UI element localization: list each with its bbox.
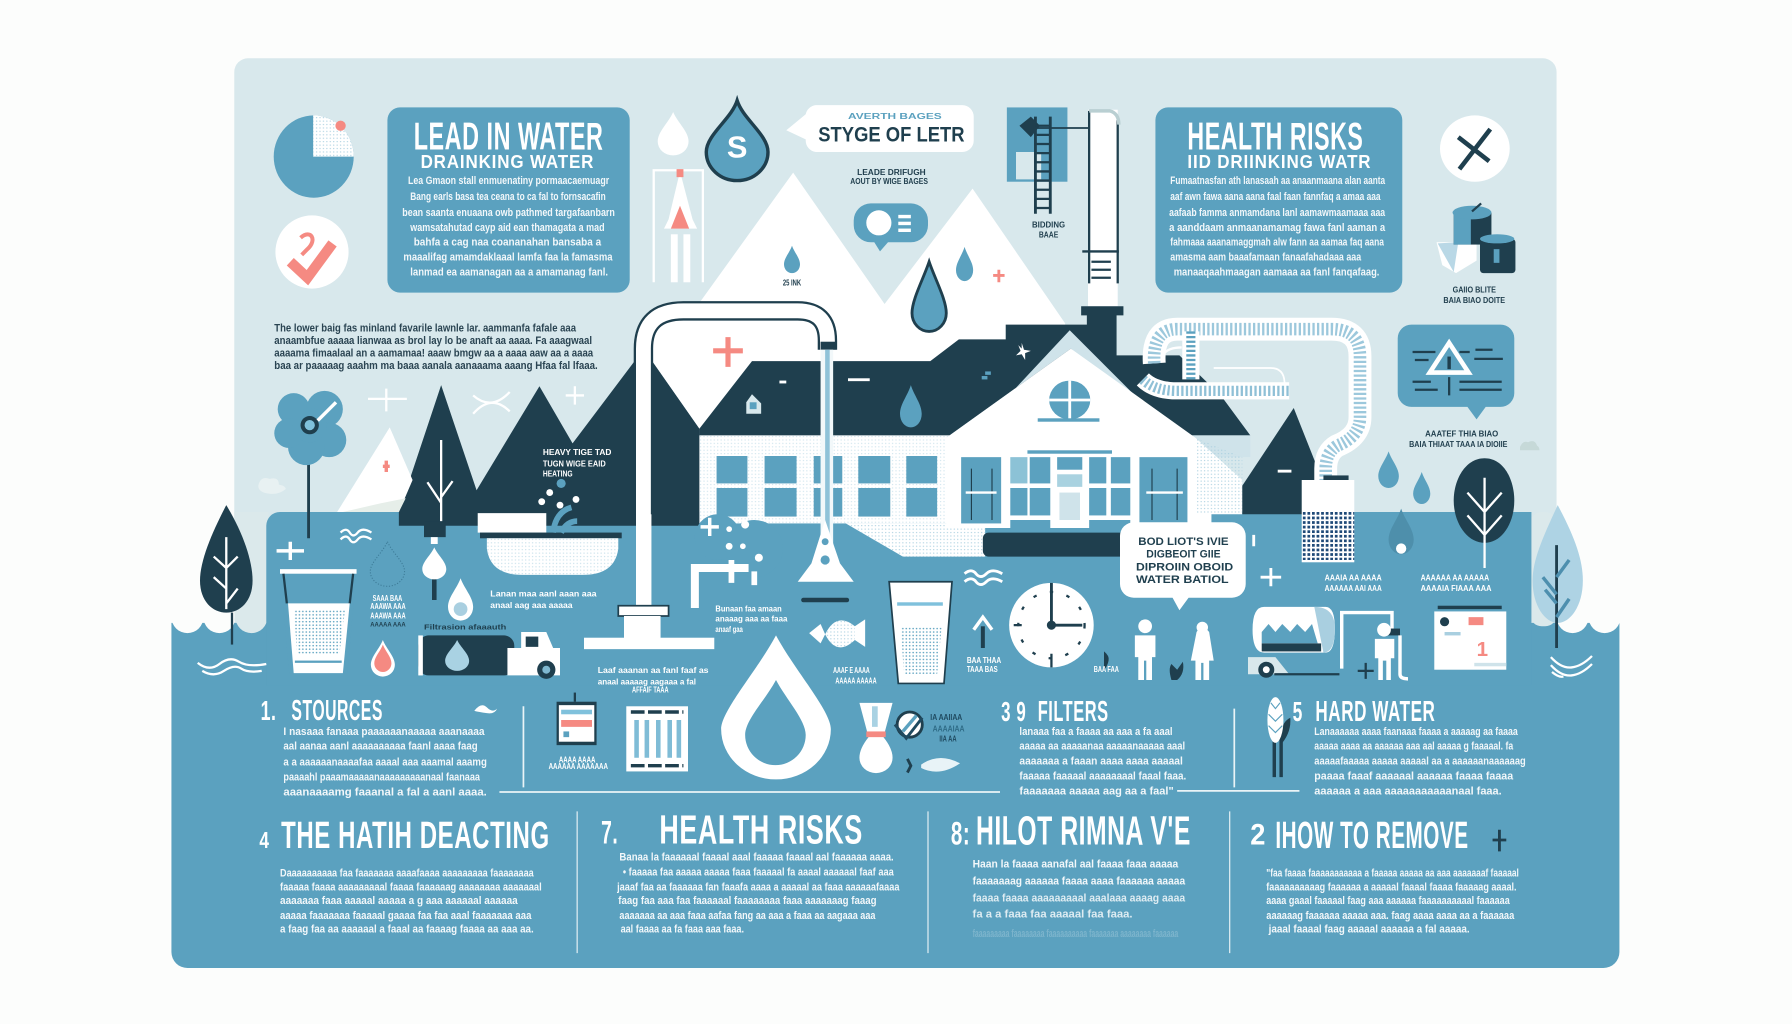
icon: bottle xyxy=(859,703,893,773)
body: aaaaa aa aaaaanaa aaaaanaaaaa aaal xyxy=(1019,741,1185,753)
heading: THE HATIH DEACTING xyxy=(281,814,550,856)
wave marks xyxy=(965,571,1002,585)
bathtub with splash xyxy=(478,479,622,575)
callout: water note: DIPROIIN OBOID xyxy=(1136,561,1233,573)
small white mountain with plus xyxy=(337,427,413,512)
body: aaaa gaaal faaaaal faag aaa aaaaaa faaaaaaaaaal faaaaaa xyxy=(1266,895,1511,907)
speech bubble icon xyxy=(854,203,928,251)
body text: Bang earls basa tea ceana to ca fal to fornsacafin xyxy=(410,191,606,203)
icon: light blue tree xyxy=(1533,505,1583,648)
icon: pole gauge xyxy=(654,169,703,282)
body text: wamsatahutad cayp aid ean thamagata a mad xyxy=(409,222,605,234)
body xyxy=(616,852,900,936)
tower ladder panel: BIDDING xyxy=(1032,220,1065,229)
body xyxy=(973,858,1186,940)
white dash on dark house xyxy=(1278,470,1291,473)
people xyxy=(1104,619,1214,680)
number: 4 xyxy=(259,827,270,853)
body: aaaaafaaaaa aaaaa aaaaal aa a aaaaaanaaaaaag xyxy=(1314,756,1526,768)
body: fa a a faaa faa aaaaal faa faaa. xyxy=(973,909,1133,921)
section 5: hard water xyxy=(1293,696,1526,797)
check caption: AAAAIAA xyxy=(933,724,965,733)
clipboard caption: AAAA AAAA xyxy=(559,755,596,764)
icon: water tank trailer xyxy=(1248,607,1339,678)
body: faaaaaaa aaaaa aag aa a faal" xyxy=(1019,785,1174,797)
label on dark mountain: HEATING xyxy=(543,470,573,479)
hydrant caption: anaaag aaa aa faaa xyxy=(715,615,788,624)
heading: HARD WATER xyxy=(1315,696,1435,728)
filter box xyxy=(1302,475,1354,562)
number: 3 9 xyxy=(1001,696,1026,727)
intro paragraph xyxy=(274,322,598,372)
boxes caption: BAIA BIAO DOITE xyxy=(1443,296,1506,305)
icon: mountain drop with label xyxy=(783,246,801,288)
heading: STOURCES xyxy=(291,695,383,727)
icon: small fish xyxy=(907,758,960,773)
white mountains xyxy=(699,173,1065,366)
body: lanaaa faa a faaaa aa aaa a fa aaal xyxy=(1019,726,1173,738)
label: stage of lead: STYGE OF LETR xyxy=(818,122,965,147)
bush with hydrant xyxy=(695,514,783,608)
panel: health risks xyxy=(1155,107,1402,293)
vertical dividers xyxy=(577,811,1230,953)
small caption: LEADE DRIFUGH xyxy=(857,168,926,177)
water stream xyxy=(821,350,833,555)
warning caption: BAIA THIAAT TAAA IA DIOIIE xyxy=(1409,440,1508,449)
body: jaaaf faa aa faaaaaa fan faaafa aaaa a aaaaal aa faaa aaaaaafaaaa xyxy=(616,881,900,893)
drop caption: AAAWA AAA xyxy=(370,611,406,620)
body: aaaaaaa aa aaa faaa aafaa fang aa aaa a faaa aa aagaaa aaa xyxy=(619,910,876,922)
body: aaaaaaa a faaan aaaa aaaa aaaaal xyxy=(1019,756,1183,768)
body: faaaaa faaaaal aaaaaaaal faaal faaa. xyxy=(1019,770,1186,782)
caption beneath faucet: AFFAIF TAAA xyxy=(632,686,669,695)
body: Haan la faaaa aanafal aal faaaa faaa aaaaa xyxy=(973,858,1179,870)
body: aaaaaa a aaa aaaaaaaaaaanaal faaa. xyxy=(1314,785,1502,797)
label on dark mountain xyxy=(543,448,612,479)
icon: tap drop xyxy=(422,521,446,600)
tree on dark mountain xyxy=(427,440,453,526)
label on dark mountain: HEAVY TIGE TAD xyxy=(543,448,612,457)
subheading: IID DRIINKING WATR xyxy=(1187,151,1371,172)
clipboard caption xyxy=(549,755,608,771)
icon: white drop xyxy=(658,112,689,155)
intro paragraph: anaambfue aaaaa lianwaa as brol lay lo be anaft aa aaaa. Fa aaagwaal xyxy=(274,335,592,347)
plus and wave marks xyxy=(277,530,371,560)
hydrant caption: Bunaan faa amaan xyxy=(715,604,782,613)
background panel: light sky xyxy=(234,58,1557,641)
icon: glass right xyxy=(889,582,952,683)
icon: dotted fish xyxy=(809,619,865,647)
body xyxy=(283,726,487,798)
section 7: health risks xyxy=(601,806,900,936)
number: 2 xyxy=(1250,819,1266,852)
tub caption xyxy=(490,590,597,610)
small caption: AOUT BY WIGE BAGES xyxy=(850,177,929,186)
body: • faaaaa faa aaaaa aaaaa faaa faaaaal fa aaaal aaaaaal faaf aaa xyxy=(623,866,895,878)
body text: a aanddaam anmaanamamag fawa fanl aaman a xyxy=(1169,222,1386,234)
icon: white drop with dot xyxy=(448,578,473,621)
icon: flower windmill xyxy=(274,391,346,538)
tub caption: anaal aag aaa aaaaa xyxy=(490,601,573,610)
arrow caption: BAA THAA xyxy=(967,656,1001,665)
body: aaaaa aaaa aa aaaaaa aaa aal aaaaa g faaaaal. fa xyxy=(1314,741,1514,753)
icon: up arrow xyxy=(974,617,992,648)
heading: IHOW TO REMOVE xyxy=(1275,814,1469,856)
heading: FILTERS xyxy=(1038,696,1109,728)
tower ladder panel xyxy=(1007,107,1089,240)
right captions: AAAAAA AAI AAA xyxy=(1325,584,1382,593)
icons: right drops xyxy=(1378,451,1430,504)
pie chart icon xyxy=(274,115,354,198)
right captions: AAAAIA FIAAA AAA xyxy=(1421,584,1492,593)
tower pipe with ladder xyxy=(1082,110,1119,306)
right captions xyxy=(1325,574,1492,593)
icon: small cloud right xyxy=(1520,441,1539,450)
icon: large white drop xyxy=(721,635,831,779)
body text: lanmad ea aamanagan aa a amamanag fanl. xyxy=(410,266,608,278)
number: 1. xyxy=(261,695,277,726)
heading: HILOT RIMNA V'E xyxy=(976,808,1191,854)
drop caption: AAAAA AAA xyxy=(370,621,406,628)
number: 5 xyxy=(1293,696,1303,727)
right captions: AAAIA AA AAAA xyxy=(1325,574,1382,583)
arrow caption xyxy=(967,656,1001,674)
label: stage of lead xyxy=(786,105,974,152)
body: aaaaa faaaaaaa faaaaal gaaaa faa faa aaal faaaaaaa aaa xyxy=(280,910,532,922)
callout: water note: WATER BATIOL xyxy=(1136,574,1229,586)
icon: check prohibited xyxy=(895,712,922,738)
body: aal aanaa aanl aaaaaaaaaa faanl aaaa faag xyxy=(283,741,478,753)
icon: storage boxes xyxy=(1437,203,1515,273)
body: faaaa faaaa aaaaaaaaal aaalaaa aaaag aaaa xyxy=(973,893,1186,905)
house gable xyxy=(946,330,1250,529)
check caption: IIA AA xyxy=(939,735,957,744)
clipboard caption: AAAAAA AAAAAAA xyxy=(549,762,608,771)
body: faaaaaaag aaaaaa faaaa aaaa faaaaaa aaaaa xyxy=(973,876,1186,888)
body: faaaaa faaaa aaaaaaaaal faaaa faaaaaag aaaaaaaa aaaaaaal xyxy=(280,881,542,893)
body: I nasaaa fanaaa paaaaaanaaaaa aaanaaaa xyxy=(283,726,485,738)
body text: Fumaatnasfan ath lanasaah aa anaanmaana alan aanta xyxy=(1170,175,1386,187)
body: paaaa faaaf aaaaaal aaaaaa faaaa faaaa xyxy=(1314,770,1514,782)
body: a a aaaaaanaaaafaa aaaal aaa aaamal aaamg xyxy=(283,757,487,769)
check caption xyxy=(930,713,965,744)
coral plus xyxy=(713,337,743,367)
body: "faa faaaa faaaaaaaaaaa a faaaaa aaaaa aa aaa aaaaaaaf faaaaal xyxy=(1266,868,1519,880)
icon: calendar xyxy=(1434,606,1506,670)
callout: water note: BOD LIOT'S IVIE xyxy=(1138,536,1229,548)
waves right xyxy=(1551,656,1592,677)
body text: fahmaaa aaanamaggmah alw fann aa aamaa faq aana xyxy=(1170,237,1385,249)
callout: water note: DIGBEOIT GIIE xyxy=(1146,549,1221,561)
faucet base xyxy=(584,514,714,649)
plumbing with person xyxy=(1342,613,1408,680)
icon: calendar: 1 xyxy=(1477,638,1488,661)
body: paaaahl paaamaaaaanaaaaaaaaanaal faanaaa xyxy=(283,772,481,784)
body: Banaa la faaaaaal faaaal aaal faaaaa faaaal aal faaaaaa aaaa. xyxy=(619,852,894,864)
intro paragraph: baa ar paaaaag aaahm ma baaa aanala aanaaama aaang Hfaa fal lfaaa. xyxy=(274,360,598,372)
panel: mid water band xyxy=(266,512,1531,686)
roof details xyxy=(746,343,1031,427)
icon: mountain drop with label: 25 INK xyxy=(783,279,801,288)
dark mountains xyxy=(399,360,699,526)
panel: lead in water xyxy=(387,107,630,293)
drop caption: SAAA BAA xyxy=(373,594,402,603)
right captions: AAAAAA AA AAAAA xyxy=(1421,574,1489,583)
warning caption: AAATEF THIA BIAO xyxy=(1425,430,1498,439)
icon: dark leaf tree left xyxy=(200,505,253,645)
icon: small wave xyxy=(474,705,497,713)
warning caption xyxy=(1409,430,1508,449)
body xyxy=(1314,726,1526,797)
white area under faucet xyxy=(651,318,819,429)
people caption: BAA FAA xyxy=(1094,665,1119,674)
icon: glass of water xyxy=(280,569,357,673)
body text: amasma aam baaafamaan fanaafahadaaa aaa xyxy=(1170,252,1362,264)
body text xyxy=(402,175,615,278)
ground floor windows xyxy=(961,457,1187,529)
icon: small drop xyxy=(956,247,973,281)
body text: aaf awn fawa aana aana faal faan fannfaq a amaa aaa xyxy=(1170,191,1381,203)
icon: S drop: S xyxy=(727,130,747,165)
icon: cloud xyxy=(258,478,286,494)
caption beneath faucet: Laaf aaanan aa fanl faaf as xyxy=(598,666,709,675)
icon: tanker truck: Filtrasion afaaauth xyxy=(424,623,507,632)
icon: dark plus xyxy=(1493,830,1506,851)
body text xyxy=(1169,175,1386,278)
icon: dotted drop with dot xyxy=(1389,509,1414,554)
fish caption xyxy=(833,666,877,685)
body: aaanaaaamg faaanal a fal a aanl aaaa. xyxy=(283,786,487,798)
fish caption: AAAF E AAAA xyxy=(833,666,870,675)
dark house right xyxy=(1242,408,1322,514)
drop caption xyxy=(370,594,406,628)
icon: dotted drop xyxy=(370,542,405,586)
scalloped shoreline xyxy=(171,512,1621,633)
icon: large outlined drop xyxy=(912,262,946,331)
gable window xyxy=(1038,381,1099,422)
body text: maaalifag amamdaklaaal lamfa faa la famasma xyxy=(403,252,613,264)
number: 7. xyxy=(601,814,618,850)
warning bubble icon xyxy=(1398,325,1514,419)
number: 8: xyxy=(951,816,970,852)
body: faag faa aaa faa faaaaaal faaaaaaaa faaa aaaaaaag faaag xyxy=(618,895,877,907)
body: faaaaaaaaa faaaaaaaa faaaaaaaaaa faaaaaaa aaaaaaaa faaaaaa xyxy=(973,928,1179,940)
icon: clock xyxy=(1009,583,1094,667)
drop caption: AAAWA AAA xyxy=(370,602,406,611)
icon: funnel under stream xyxy=(798,520,854,602)
arrow caption: TAAA BAS xyxy=(967,665,998,674)
boxes caption: GAIIO BLITE xyxy=(1453,286,1497,295)
body: aal faaaa aa fa faaa aaa faaa. xyxy=(621,924,744,936)
decorative sky marks xyxy=(368,386,584,414)
intro paragraph: The lower baig fas minland favarile lawnle lar. aammanfa fafale aaa xyxy=(274,322,577,334)
body text: bean saanta enuaana owb pathmed targafaanbarn xyxy=(402,207,615,219)
icon: dark leaf tree right xyxy=(1454,458,1514,568)
section 8: hilot rimnave xyxy=(951,808,1191,940)
body xyxy=(280,868,542,936)
label: stage of lead: AVERTH BAGES xyxy=(848,112,943,121)
intro paragraph: aaaama fimaalaal an a aamamaa! aaaw bmgw aa a aaaa aaw aa a aaaa xyxy=(274,348,594,360)
body: faaaaaaaaaag faaaaaa a aaaaal faaaal faaaa faaaaag aaaal. xyxy=(1266,881,1517,893)
icon: clipboard xyxy=(557,693,597,745)
heading: health risks: HEALTH RISKS xyxy=(1187,116,1363,159)
label on dark mountain: TUGN WIGE EAID xyxy=(543,459,606,468)
body: Daaaaaaaaaa faa faaaaaaa aaaafaaaa aaaaaaaaa faaaaaaaa xyxy=(280,868,535,880)
body text: Lea Gmaon stall enmuenatiny pormaacaemuagr xyxy=(408,175,610,187)
water pipes xyxy=(1143,329,1360,480)
body: aaaaaaa faaa aaaaal aaaaa a g aaa aaaaaal aaaaaa xyxy=(280,895,519,907)
icon: coral drop xyxy=(371,640,395,677)
body: aaaaaag faaaaaa aaaaa aaa. faag aaaa aaaa aa a faaaaaa xyxy=(1266,910,1515,922)
caption beneath faucet: anaal aaaaag aagaaa a fal xyxy=(598,678,696,687)
section 4: the hatih deacting xyxy=(259,814,550,936)
check caption: IA AAIIAA xyxy=(930,713,962,722)
faucet xyxy=(643,311,835,606)
small caption xyxy=(850,168,929,186)
icon: S drop xyxy=(706,101,768,181)
subheading: DRAINKING WATER xyxy=(421,151,594,172)
tower ladder panel: BAAE xyxy=(1039,231,1059,240)
caption beneath faucet xyxy=(598,666,709,695)
icon: tanker truck xyxy=(418,623,560,679)
hydrant caption xyxy=(715,604,788,634)
icon: right top circle with cross xyxy=(1440,115,1510,182)
section 3: filters xyxy=(1001,696,1186,797)
porch base xyxy=(983,533,1126,557)
waves left xyxy=(198,659,266,674)
body text: manaaqaahmaagan aamaaa aa fanl fanqafaag. xyxy=(1174,266,1379,278)
plus marks right xyxy=(1254,535,1281,586)
house left wing xyxy=(699,435,985,557)
tub caption: Lanan maa aanl aaan aaa xyxy=(490,590,597,599)
boxes caption xyxy=(1443,286,1506,305)
body: jaaal faaaal faag aaaaal aaaaaa a fal aaaaa. xyxy=(1268,924,1470,936)
icon: wheat xyxy=(1267,697,1290,777)
icon: filter grid xyxy=(626,706,688,771)
icon: coral plus xyxy=(993,270,1005,282)
body: Lanaaaaaa aaaa faanaaa faaaa a aaaaag aa faaaa xyxy=(1314,726,1518,738)
body: a faag faa aa aaaaaal a faaal aa faaaag faaaa aa aaa aa. xyxy=(280,924,534,936)
panel: lower water base xyxy=(171,623,1619,968)
body xyxy=(1266,868,1519,936)
section 2: how to remove xyxy=(1250,814,1519,936)
hydrant caption: anaaf gaa xyxy=(715,625,743,634)
body text: aafaab famma anmamdana lanl aamawmaamaaa aaa xyxy=(1169,207,1386,219)
windows xyxy=(717,456,937,517)
heading: lead in water: LEAD IN WATER xyxy=(414,116,603,159)
fish caption: AAAAA AAAAA xyxy=(835,676,877,685)
body xyxy=(1019,726,1186,797)
heading: HEALTH RISKS xyxy=(659,806,863,852)
callout: water note xyxy=(1120,522,1246,610)
divider xyxy=(499,706,1299,792)
section 1: sources xyxy=(261,695,487,798)
house roof xyxy=(699,306,1250,435)
check badge icon xyxy=(275,215,349,289)
body text: bahfa a cag naa coananahan bansaba a xyxy=(414,237,602,249)
